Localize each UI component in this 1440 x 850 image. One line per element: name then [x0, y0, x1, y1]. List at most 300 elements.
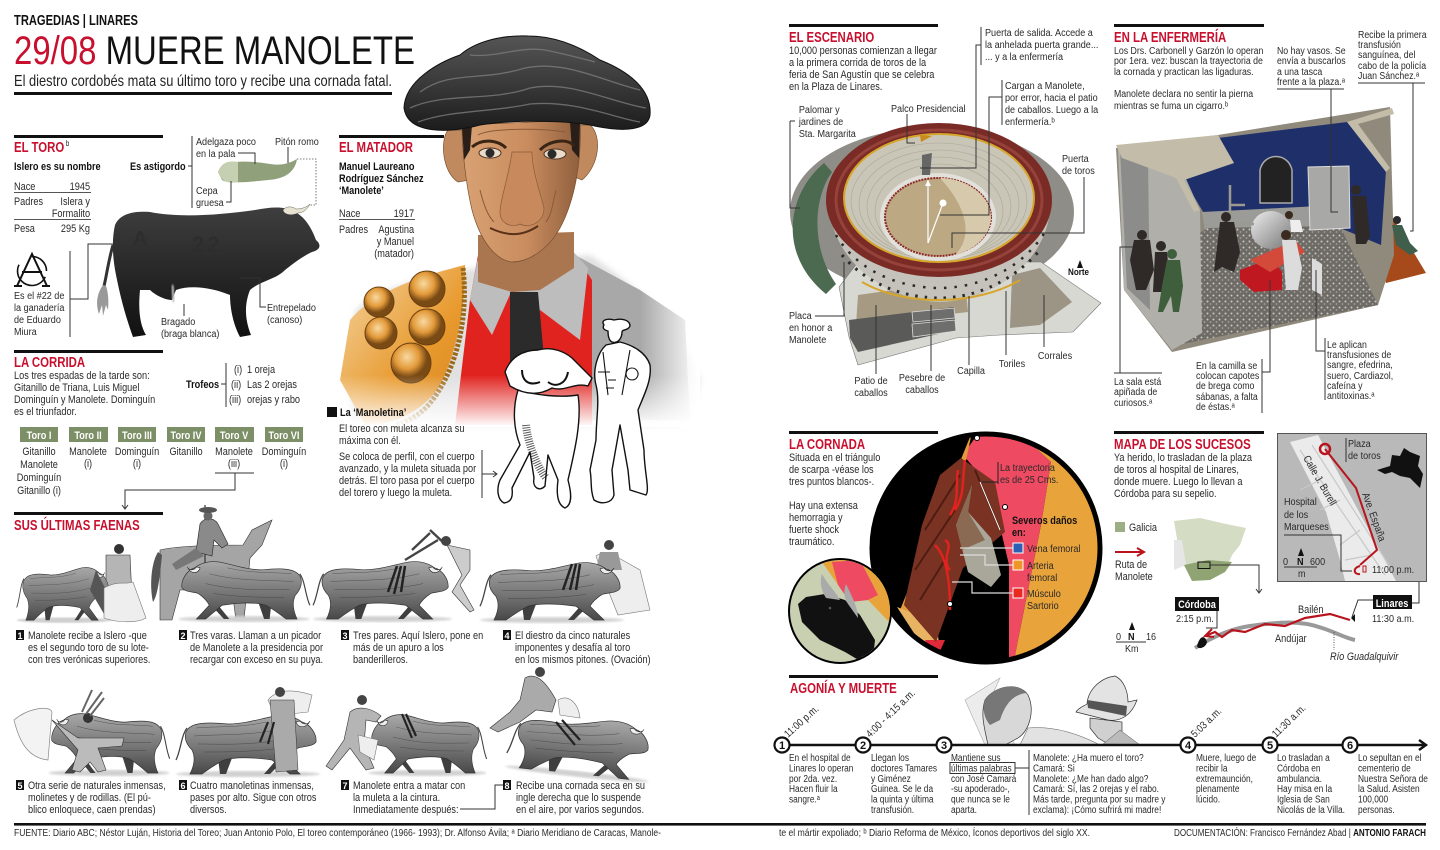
timeline captions: aparta. [951, 804, 977, 816]
bullring callouts: por error, hacia el patio [1005, 92, 1098, 104]
bull results table: Gitanillo [22, 446, 56, 458]
route map: Andújar [1275, 633, 1307, 645]
bullring callouts: Manolete [789, 334, 827, 346]
timeline captions: sangre.ᵃ [789, 794, 820, 806]
timeline captions: plenamente [1196, 783, 1240, 795]
panel: el toro [14, 135, 319, 340]
city inset map: Calle J. Burell [1300, 454, 1338, 508]
numbered captions row 1: de Manolete a la presidencia por [190, 642, 324, 654]
spain locator map [1174, 518, 1262, 593]
timeline captions: recibir la [1196, 763, 1228, 775]
bull results table: (i) [84, 458, 92, 470]
trophies legend: 1 oreja [247, 364, 275, 376]
matador facts: y Manuel [377, 236, 414, 248]
bullring callouts: Patio de [854, 375, 888, 387]
infirmary callouts: sábanas, a falta [1196, 391, 1258, 403]
infirmary callouts: transfusión [1358, 39, 1401, 51]
route map: 2:15 p.m. [1176, 613, 1214, 625]
heading: la corrida: LA CORRIDA [14, 353, 85, 370]
bullring callouts: Puerta de salida. Accede a [985, 27, 1093, 39]
timeline captions: Nicolás de la Villa. [1277, 804, 1345, 816]
mapa text: Córdoba para su sepelio. [1114, 488, 1217, 500]
route map: Río Guadalquivir [1330, 651, 1399, 663]
timeline: 4:00 - 4:15 a.m. [864, 688, 918, 740]
corrida text: Gitanillo de Triana, Luis Miguel [14, 382, 139, 394]
matador facts: Nace [339, 208, 361, 220]
city inset map: Marqueses [1284, 521, 1329, 533]
numbered captions row 1: El diestro da cinco naturales [515, 630, 630, 642]
heading: la cornada: LA CORNADA [789, 435, 865, 452]
wound callouts: femoral [1027, 572, 1057, 584]
bullring callouts: Pesebre de [899, 372, 946, 384]
timeline captions: últimas palabras [951, 763, 1012, 775]
trophies legend: (i) [234, 364, 242, 376]
route map: Bailén [1298, 604, 1324, 616]
route map: 11:30 a.m. [1372, 613, 1414, 625]
city inset map: de los [1284, 509, 1308, 521]
timeline: 2 [860, 740, 866, 752]
numbered captions row 1: con tres verónicas superiores. [28, 654, 150, 666]
escenario text: 10,000 personas comienzan a llegar [789, 45, 937, 57]
bullring callouts: en honor a [789, 322, 833, 334]
numbered captions row 2: Manolete entra a matar con [353, 780, 465, 792]
city inset map: N [1297, 556, 1304, 568]
numbered captions row 1: 4 [504, 631, 510, 641]
panel: el matador [339, 135, 444, 260]
numbered captions row 1: más de un apuro a los [353, 642, 444, 654]
line art: manoletina pass [498, 319, 650, 508]
bullring callouts: de caballos. Luego a la [1005, 104, 1099, 116]
city inset map: Plaza [1348, 438, 1371, 450]
portrait of Manolete [340, 36, 700, 430]
wound callouts: Vena femoral [1027, 543, 1080, 555]
timeline captions: por 2da. vez. [789, 773, 837, 785]
cornada text: de scarpa -véase los [789, 464, 874, 476]
brand note: Miura [14, 326, 37, 338]
timeline: 4 [1185, 740, 1192, 752]
panel: la corrida [14, 350, 306, 509]
infirmary callouts: frente a la plaza.ᵃ [1277, 76, 1345, 88]
infirmary callouts: suero, Cardiazol, [1327, 370, 1393, 382]
timeline captions: Lo trasladan a [1277, 752, 1330, 764]
trophies legend: Trofeos [186, 379, 220, 391]
numbered captions row 2: en el aire, por varios segundos. [516, 804, 644, 816]
route map: Km [1125, 643, 1139, 655]
timeline captions: Nuestra Señora de [1358, 773, 1428, 785]
bullring callouts: enfermería.ᵇ [1005, 116, 1055, 128]
timeline captions: Camará: Si [1033, 763, 1075, 775]
horn diagram [130, 136, 319, 209]
scene 2 [151, 505, 310, 622]
infirmary illustration [1116, 107, 1426, 352]
city inset map: 600 [1310, 556, 1326, 568]
bullring illustration [790, 123, 1101, 365]
panel: la cornada [789, 431, 1102, 668]
numbered captions row 2: ingle derecha que lo suspende [516, 792, 641, 804]
panel: mapa de los sucesos [1114, 431, 1426, 663]
numbered captions row 2: 8 [504, 781, 510, 791]
bull results table: (iii) [228, 458, 240, 470]
manoletina text: máxima con él. [339, 435, 401, 447]
bullring callouts: Puerta [1062, 153, 1089, 165]
cornada text: Hay una extensa [789, 500, 858, 512]
timeline captions: y Giménez [871, 773, 911, 785]
timeline captions: Más tarde, pregunta por su madre y [1033, 794, 1166, 806]
timeline captions: Hay misa en la [1277, 783, 1333, 795]
bull results table: Dominguín [17, 472, 61, 484]
escenario text: a la primera corrida de toros de la [789, 57, 927, 69]
title: 29/08 MUERE MANOLETE [14, 29, 415, 73]
timeline: 3 [941, 740, 947, 752]
infirmary callouts [1114, 29, 1427, 413]
timeline captions: doctores Tamares [871, 763, 937, 775]
route map: Linares [1376, 598, 1409, 610]
horn diagram: Cepa [196, 185, 218, 197]
timeline captions: la Salud. Asisten [1358, 783, 1420, 795]
bull callouts: (canoso) [267, 314, 302, 326]
numbered captions row 1: Manolete recibe a Islero -que [28, 630, 147, 642]
panel: la manoletina [327, 319, 650, 508]
bullring callouts: Cargan a Manolete, [1005, 80, 1085, 92]
matador name: ‘Manolete’ [339, 185, 384, 197]
wound illustration [870, 432, 1102, 664]
mapa text: de toros al hospital de Linares, [1114, 464, 1239, 476]
manoletina text: El toreo con muleta alcanza su [339, 423, 464, 435]
city inset map: 11:00 p.m. [1372, 564, 1414, 576]
heading: el toro: b [64, 139, 69, 148]
infirmary callouts: No hay vasos. Se [1277, 45, 1346, 57]
bullring callouts: Palomar y [799, 104, 840, 116]
timeline captions: Hacen fluir la [789, 783, 838, 795]
enfermería text: mientras se fuma un cigarro.ᵇ [1114, 100, 1229, 112]
header kicker: TRAGEDIAS | LINARES [14, 13, 138, 29]
manoletina text: del torero y luego la muleta. [339, 487, 452, 499]
bull results table: (i) [280, 458, 288, 470]
bull results table: Dominguín [262, 446, 306, 458]
numbered captions row 1: imponentes y desafía al toro [515, 642, 631, 654]
bull facts table [14, 181, 91, 235]
bullring callouts: Palco Presidencial [891, 103, 966, 115]
map legend: Manolete [1115, 571, 1153, 583]
wound callouts [952, 462, 1080, 612]
numbered captions row 2: Cuatro manoletinas inmensas, [190, 780, 314, 792]
numbered captions row 1: es el segundo toro de su lote- [28, 642, 149, 654]
infirmary callouts: antitoxinas.ᵃ [1327, 390, 1375, 402]
bull results table: Gitanillo (i) [17, 485, 61, 497]
city inset map: 0 [1283, 556, 1289, 568]
numbered captions row 2: Recibe una cornada seca en su [516, 780, 645, 792]
infirmary callouts: colocan capotes [1196, 370, 1259, 382]
trophies legend: orejas y rabo [247, 394, 300, 406]
heading: agonía: AGONÍA Y MUERTE [790, 679, 897, 696]
horn diagram: Pitón romo [275, 136, 319, 148]
timeline captions: Guinea. Se le da [871, 783, 934, 795]
manoletina text: avanzado, y la muleta situada por [339, 463, 477, 475]
matador facts: Padres [339, 224, 368, 236]
bullring callouts: Capilla [957, 365, 985, 377]
bullring callouts: jardines de [798, 116, 844, 128]
horn diagram: gruesa [196, 197, 224, 209]
bullring callouts: Norte [1068, 266, 1089, 277]
horn diagram: en la pala [196, 148, 236, 160]
numbered captions row 2: Inmediatamente después: [353, 804, 459, 816]
icon: ganadería brand [14, 254, 50, 286]
wound callouts: Severos daños [1012, 515, 1078, 527]
bull results table: Manolete [20, 459, 58, 471]
timeline captions: Llegan los [871, 752, 909, 764]
infirmary callouts: envía a buscarlos [1277, 55, 1346, 67]
infirmary callouts: curiosos.ᵃ [1114, 397, 1153, 409]
numbered captions row 1: banderilleros. [353, 654, 408, 666]
numbered captions row 2: blico enloquece, caen prendas) [28, 804, 155, 816]
escenario text: feria de San Agustín que se celebra [789, 69, 935, 81]
trophies legend: Las 2 orejas [247, 379, 297, 391]
scene 7 [326, 695, 487, 776]
enfermería text: la cornada y practican las ligaduras. [1114, 66, 1254, 78]
corrida text: Dominguín y Manolete. Dominguín [14, 394, 155, 406]
infirmary callouts: Juan Sánchez.ᵃ [1358, 70, 1420, 82]
route map: 0 [1116, 631, 1122, 643]
scene 1 [17, 544, 146, 623]
bullring callouts: Corrales [1038, 350, 1072, 362]
timeline: 11:00 p.m. [782, 703, 821, 740]
numbered captions row 2: molinetes y de rodillas. (El pú- [28, 792, 151, 804]
infirmary callouts: Le aplican [1327, 339, 1367, 351]
numbered captions row 1: Tres varas. Llaman a un picador [190, 630, 322, 642]
matador facts: (matador) [374, 248, 414, 260]
timeline captions: Lo sepultan en el [1358, 752, 1421, 764]
bull results table: Toro IV [171, 430, 202, 442]
bullring callouts: ... y a la enfermería [985, 51, 1064, 63]
numbered captions row 1: en los mismos pitones. (Ovación) [515, 654, 651, 666]
heading: faenas: SUS ÚLTIMAS FAENAS [14, 516, 140, 533]
heading: la manoletina: La ‘Manoletina’ [340, 407, 406, 419]
bull facts table: 1945 [70, 181, 90, 193]
numbered captions row 2: diversos. [190, 804, 227, 816]
trophies legend [186, 363, 300, 407]
timeline captions: Linares lo operan [789, 763, 853, 775]
scene 4 [480, 540, 650, 623]
bullring callouts: Toriles [999, 358, 1025, 370]
footer: DOCUMENTACIÓN: Francisco Fernández Abad | ANTONIO FARACH [1174, 826, 1426, 839]
timeline captions: con José Camará [951, 773, 1017, 785]
timeline captions [789, 750, 1428, 816]
city inset map [1278, 434, 1426, 582]
timeline: 11:30 a.m. [1270, 703, 1309, 740]
arrow: to figure [482, 450, 497, 498]
matador name: Manuel Laureano [339, 161, 414, 173]
bull callouts [161, 278, 316, 340]
infirmary callouts: apiñada de [1114, 386, 1157, 398]
infirmary callouts: transfusiones de [1327, 349, 1391, 361]
bullring callouts: la anhelada puerta grande... [985, 39, 1098, 51]
timeline: 5 [1267, 740, 1273, 752]
cornada text: Situada en el triángulo [789, 452, 881, 464]
timeline captions: En el hospital de [789, 752, 851, 764]
numbered captions row 1: 1 [17, 631, 23, 641]
icon: black square bullet [327, 407, 337, 417]
timeline captions: cementerio de [1358, 763, 1411, 775]
timeline captions: exclama): ¡Cómo sufrirá mi madre! [1033, 804, 1161, 816]
numbered captions row 1: Tres pares. Aquí Islero, pone en [353, 630, 483, 642]
infirmary callouts: La sala está [1114, 376, 1162, 388]
route map: Córdoba [1178, 599, 1216, 611]
cornada text: hemorragia y [789, 512, 843, 524]
cornada text: traumático. [789, 536, 834, 548]
city inset map: de toros [1348, 450, 1381, 462]
bull callouts: Entrepelado [267, 302, 316, 314]
timeline: 1 [779, 740, 785, 752]
manoletina text: detrás. El toro pasa por el cuerpo [339, 475, 475, 487]
infirmary callouts: sanguínea, del [1358, 49, 1415, 61]
horn diagram: Es astigordo [130, 161, 186, 173]
infirmary callouts: de brega como [1196, 380, 1254, 392]
panel: el escenario [789, 24, 1101, 399]
brand note: Es el #22 de [14, 290, 65, 302]
brand note: la ganadería [14, 302, 65, 314]
timeline captions: Camará: Sí, las 2 orejas y el rabo. [1033, 783, 1159, 795]
panel: en la enfermería [1114, 24, 1427, 413]
timeline captions: Muere, luego de [1196, 752, 1256, 764]
bull callouts: Bragado [161, 316, 196, 328]
bull facts table: 295 Kg [61, 223, 90, 235]
timeline captions: 100,000 [1358, 794, 1388, 806]
heading: el matador: EL MATADOR [339, 138, 413, 155]
bull facts table: Pesa [14, 223, 35, 235]
bull results table: Toro III [122, 430, 152, 442]
infirmary callouts: En la camilla se [1196, 360, 1257, 372]
escenario text: en la Plaza de Linares. [789, 81, 882, 93]
numbered captions row 2: 5 [17, 781, 23, 791]
timeline captions: que nunca se le [951, 794, 1010, 806]
timeline captions: transfusión. [871, 804, 914, 816]
infirmary callouts: cabo de la policía [1358, 60, 1427, 72]
timeline captions: Manolete: ¿Ha muero el toro? [1033, 752, 1144, 764]
wound callouts: La trayectoria [1000, 462, 1055, 474]
sketch: manolete and camará [965, 676, 1140, 745]
bull facts table: Nace [14, 181, 36, 193]
bull illustration: 22 [192, 232, 222, 257]
bull results table: (i) [133, 458, 141, 470]
enfermería text: Los Drs. Carbonell y Garzón lo operan [1114, 45, 1263, 57]
bullring callouts: Sta. Margarita [799, 128, 856, 140]
wound callouts: es de 25 Cms. [1000, 474, 1058, 486]
matador facts: 1917 [394, 208, 414, 220]
bullring callouts [789, 27, 1099, 399]
bull results table: Toro I [27, 430, 52, 442]
enfermería text: Manolete declara no sentir la pierna [1114, 88, 1254, 100]
scene 6 [176, 687, 320, 777]
bullring callouts: de toros [1062, 165, 1095, 177]
map legend: Galicia [1129, 522, 1157, 534]
enfermería text: por 1era. vez: buscan la trayectoria de [1114, 55, 1263, 67]
trophies legend: (iii) [229, 394, 241, 406]
map legend: Ruta de [1115, 559, 1148, 571]
bull results table: Toro VI [269, 430, 300, 442]
heading: mapa: MAPA DE LOS SUCESOS [1114, 435, 1251, 452]
timeline captions: -su apoderado-, [951, 783, 1010, 795]
route map [1116, 503, 1422, 663]
timeline: 5:03 a.m. [1189, 706, 1224, 740]
timeline captions: Córdoba en [1277, 763, 1321, 775]
route map: N [1128, 631, 1135, 643]
bullring callouts: caballos [854, 387, 888, 399]
arrow: toro v to faenas [122, 473, 254, 509]
corrida text: Los tres espadas de la tarde son: [14, 370, 150, 382]
bull callouts: (braga blanca) [161, 328, 219, 340]
numbered captions row 1: 2 [180, 631, 186, 641]
heading: el toro: EL TORO [14, 138, 64, 155]
infirmary callouts: a una tasca [1277, 66, 1323, 78]
numbered captions row 1: 3 [342, 631, 348, 641]
bull results table: Manolete [69, 446, 107, 458]
bull results table: Toro V [220, 430, 248, 442]
corrida text: es el triunfador. [14, 406, 77, 418]
numbered captions row 2: pases por alto. Sigue con otros [190, 792, 316, 804]
numbered captions row 2 [16, 780, 645, 816]
numbered captions row 2: Otra serie de naturales inmensas, [28, 780, 166, 792]
scene 3 [313, 530, 474, 622]
numbered captions row 2: la muleta a la cintura. [353, 792, 440, 804]
footer [14, 823, 1426, 839]
numbered captions row 2: 6 [180, 781, 186, 791]
mapa text: Ya herido, lo trasladan de la plaza [1114, 452, 1252, 464]
heading: el escenario: EL ESCENARIO [789, 28, 874, 45]
mapa text: donde muere. Luego lo llevan a [1114, 476, 1243, 488]
numbered captions row 1 [16, 630, 651, 666]
timeline [774, 688, 1426, 752]
timeline captions: ambulancia. [1277, 773, 1322, 785]
city inset map: m [1298, 568, 1306, 580]
bull illustration: A [133, 228, 147, 250]
manoletina text: Se coloca de perfil, con el cuerpo [339, 451, 475, 463]
timeline captions: la quinta y última [871, 794, 934, 806]
city inset map: Hospital [1284, 496, 1317, 508]
subtitle: El diestro cordobés mata su último toro y recibe una cornada fatal. [14, 73, 392, 90]
bull results table [17, 427, 306, 497]
timeline captions: Iglesia de San [1277, 794, 1330, 806]
trophies legend: (ii) [231, 379, 241, 391]
bull facts table: Padres [14, 196, 43, 208]
panel: agonía y muerte [774, 675, 1428, 816]
timeline captions: extremaunción, [1196, 773, 1253, 785]
matador facts [339, 208, 415, 260]
detail: bull horn inset [789, 558, 892, 668]
timeline captions: personas. [1358, 804, 1395, 816]
scene 5 [14, 690, 170, 776]
bull name: Islero es su nombre [14, 161, 101, 173]
timeline captions: Mantiene sus [951, 752, 1001, 764]
bull results table: Gitanillo [169, 446, 203, 458]
timeline captions: Manolete: ¿Me han dado algo? [1033, 773, 1148, 785]
matador facts: Agustina [378, 224, 414, 236]
bullring callouts: Placa [789, 310, 812, 322]
city inset map: Ave. España [1359, 491, 1388, 544]
heading: enfermería: EN LA ENFERMERÍA [1114, 28, 1227, 45]
bull facts table: Formalito [52, 208, 90, 220]
footer: FUENTE: Diario ABC; Néstor Luján, Historia del Toreo; Juan Antonio Polo, El toreo contemporáneo (1966- 1993); Dr. Alfonso Ávila; ᵃ Diario Meridiano de Caracas, Manole- [14, 826, 661, 839]
panel: sus últimas faenas [14, 505, 654, 816]
timeline captions: lúcido. [1196, 794, 1220, 806]
infirmary callouts: Recibe la primera [1358, 29, 1427, 41]
bull facts table: Islera y [60, 196, 90, 208]
infirmary callouts: sangre, efedrina, [1327, 359, 1393, 371]
infirmary callouts: cafeína y [1327, 380, 1363, 392]
matador name: Rodríguez Sánchez [339, 173, 424, 185]
horn diagram: Adelgaza poco [196, 136, 256, 148]
map legend [1115, 522, 1157, 583]
route map: 16 [1146, 631, 1157, 643]
